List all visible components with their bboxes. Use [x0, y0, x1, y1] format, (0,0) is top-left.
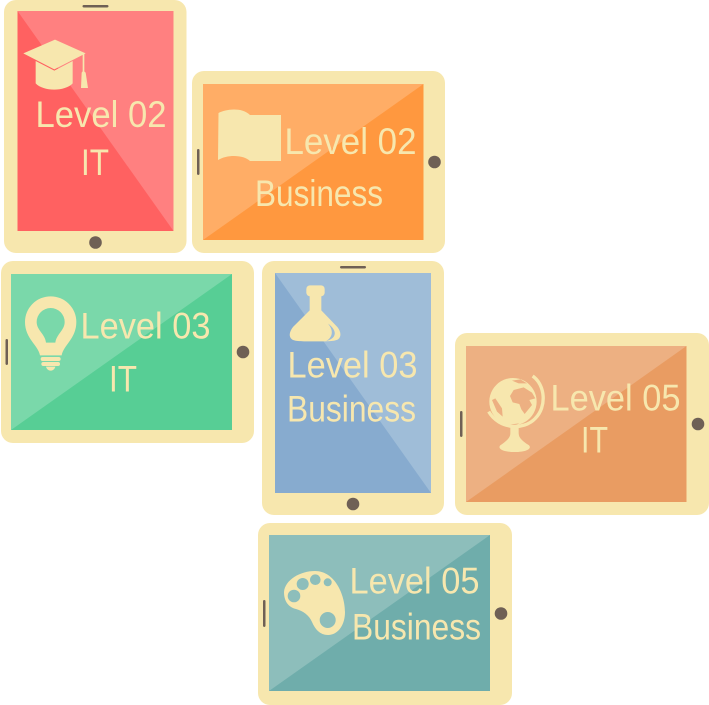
speaker — [263, 600, 266, 627]
panel: Level 05 IT tablet — [455, 333, 709, 515]
screen — [466, 346, 686, 502]
home button — [692, 418, 704, 430]
icon: flask — [290, 285, 340, 341]
screen glare — [269, 535, 490, 691]
speaker — [460, 411, 462, 437]
screen — [18, 11, 174, 231]
tablet body — [192, 71, 445, 253]
icon: globe — [489, 376, 543, 452]
screen — [11, 274, 232, 430]
tablet body — [258, 523, 512, 705]
panel: Level 03 Business tablet — [262, 261, 444, 515]
label: Level 02: Level 02 — [36, 94, 166, 135]
screen glare — [203, 84, 424, 240]
home button — [237, 346, 249, 358]
label: Level 05: Level 05 — [550, 378, 680, 418]
screen glare — [11, 274, 232, 430]
panel: Level 02 IT tablet — [4, 0, 186, 253]
label: Level 05: Level 05 — [350, 560, 480, 602]
screen — [269, 535, 490, 691]
label: Business: Business — [255, 173, 383, 214]
tablet body — [4, 0, 186, 253]
speaker — [6, 339, 8, 365]
label: Business: Business — [352, 606, 481, 648]
speaker — [340, 266, 366, 268]
panel: Level 02 Business tablet — [192, 71, 445, 253]
home button — [89, 236, 102, 249]
icon: paint palette — [284, 571, 345, 635]
screen — [275, 273, 431, 493]
home button — [347, 498, 359, 510]
icon: graduation cap — [23, 40, 88, 90]
tablet body — [455, 333, 709, 515]
speaker — [197, 149, 200, 175]
screen glare — [275, 273, 431, 493]
screen glare — [18, 11, 174, 231]
label: Level 02: Level 02 — [284, 121, 416, 162]
tablet body — [262, 261, 444, 515]
speaker — [82, 5, 108, 8]
label: Business: Business — [287, 388, 416, 430]
panel: Level 05 Business tablet — [258, 523, 512, 705]
icon: light bulb — [25, 296, 76, 371]
home button — [495, 607, 507, 620]
label: Level 03: Level 03 — [288, 344, 418, 386]
icon: open book — [218, 110, 281, 161]
screen glare — [466, 346, 686, 502]
label: IT: IT — [109, 358, 137, 400]
label: Level 03: Level 03 — [80, 306, 210, 346]
home button — [428, 156, 441, 168]
label: IT: IT — [81, 142, 109, 183]
tablet body — [1, 261, 254, 443]
screen — [203, 84, 424, 240]
label: IT: IT — [581, 420, 608, 460]
panel: Level 03 IT tablet — [1, 261, 254, 443]
